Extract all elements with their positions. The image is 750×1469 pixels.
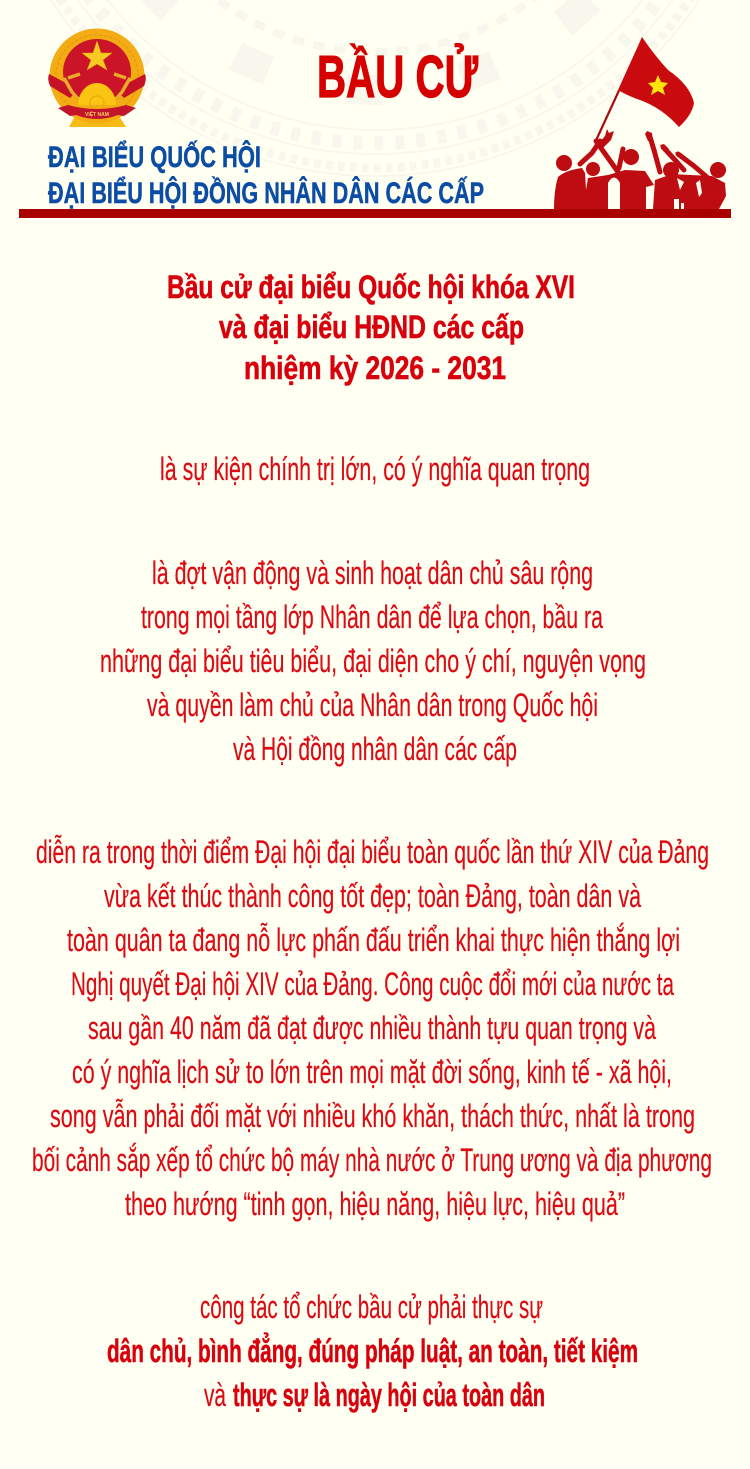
icon: national emblem: VIỆT NAM (85, 110, 109, 118)
divider bar (19, 209, 731, 218)
heading: election statement: nhiệm kỳ 2026 - 2031 (244, 350, 506, 386)
icon: flag and crowd silhouette (554, 37, 726, 209)
text block: organisation requirements (107, 1289, 638, 1413)
icon: national emblem (48, 28, 146, 127)
heading: election statement (167, 269, 575, 386)
text block: organisation requirements: công tác tổ chức bầu cử phải thực sự (200, 1289, 543, 1325)
subtitle line 1: ĐẠI BIỂU QUỐC HỘI (48, 140, 261, 174)
heading: election statement: Bầu cử đại biểu Quốc hội khóa XVI (167, 269, 575, 305)
text block: democratic campaign: và Hội đồng nhân dân các cấp (233, 731, 517, 767)
text block: organisation requirements: thực sự là ngày hội của toàn dân (233, 1377, 545, 1413)
subtitle line 2: ĐẠI BIỂU HỘI ĐỒNG NHÂN DÂN CÁC CẤP (48, 176, 484, 210)
title: BẦU CỬ (317, 43, 478, 110)
text block: organisation requirements: và (204, 1377, 226, 1413)
text block: democratic campaign (100, 555, 646, 767)
text block: context of the election (32, 834, 712, 1222)
header (19, 28, 731, 218)
heading: election statement: và đại biểu HĐND các cấp (219, 309, 524, 345)
